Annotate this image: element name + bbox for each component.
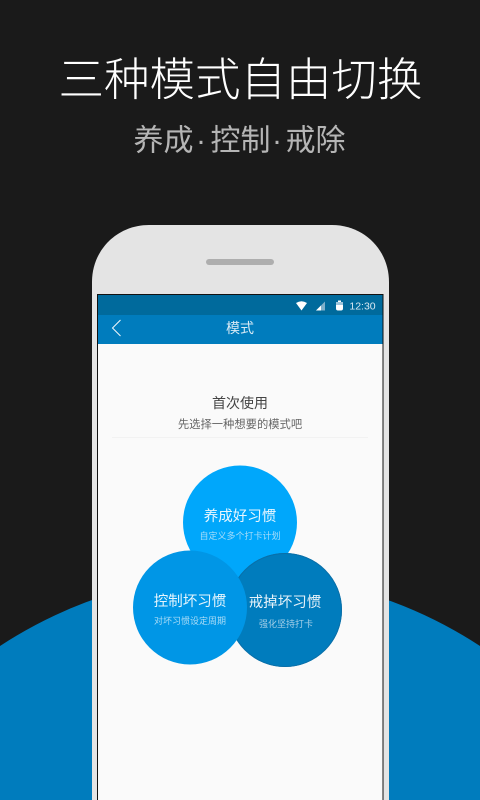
phone speaker: [206, 259, 274, 265]
phone mockup: [92, 225, 389, 800]
screen content background: [98, 344, 382, 800]
icon: battery: [336, 300, 343, 310]
mode circle: build good habits: 养成好习惯: [204, 508, 276, 525]
phone screen: [97, 294, 384, 800]
mode circle: build good habits: 自定义多个打卡计划: [199, 530, 281, 541]
mode circle: build good habits: [183, 466, 297, 580]
screen frame: [97, 294, 384, 800]
phone body: [92, 225, 389, 800]
text: choose a mode: 先选择一种想要的模式吧: [178, 417, 302, 431]
mode circle: control bad habits: 控制坏习惯: [154, 593, 226, 610]
toolbar title: 模式: [226, 320, 254, 336]
background blue arc: [0, 574, 480, 800]
icon: wifi: [296, 301, 307, 310]
mode circle: quit bad habits: 戒掉坏习惯: [249, 594, 321, 611]
toolbar: [98, 315, 382, 344]
status bar: [98, 295, 382, 315]
mode circle: quit bad habits: 强化坚持打卡: [259, 618, 313, 629]
title: 三种模式自由切换: [58, 54, 423, 106]
mode circle: control bad habits: 对坏习惯设定周期: [154, 615, 226, 626]
mode circle: quit bad habits: [228, 553, 342, 667]
icon: back arrow: [112, 320, 120, 336]
heading: first use: 首次使用: [212, 395, 268, 411]
icon: signal: [316, 302, 325, 310]
subtitle: 养成·控制·戒除: [134, 124, 346, 158]
status time: 12:30: [349, 300, 376, 312]
mode circle: control bad habits: [133, 550, 247, 664]
